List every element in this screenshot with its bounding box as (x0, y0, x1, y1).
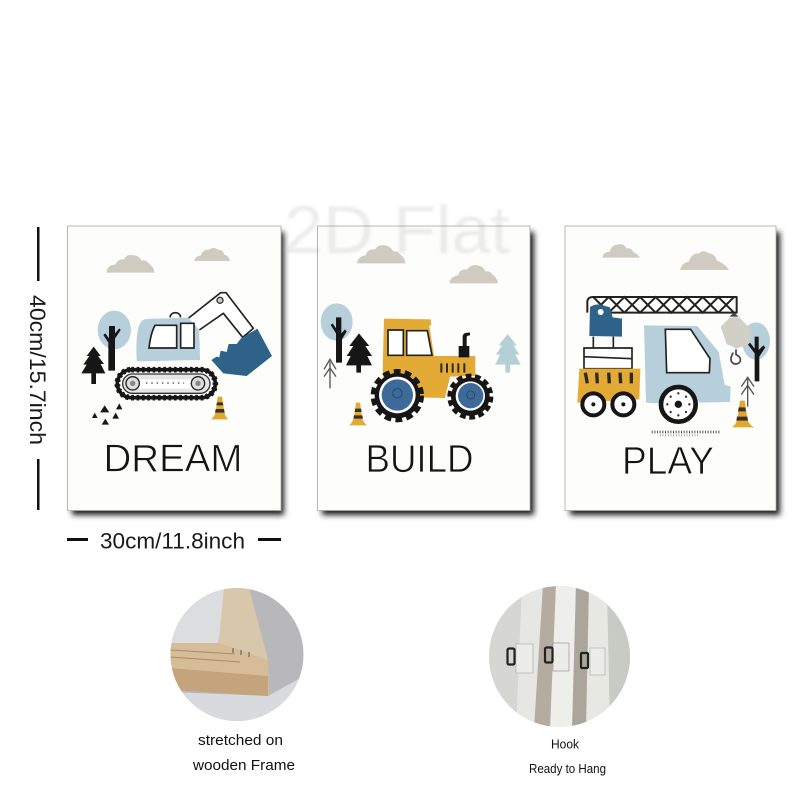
caption: Hook Ready to Hang: Hook (551, 736, 579, 752)
panel: PLAY crane print (565, 226, 780, 515)
caption: Hook Ready to Hang: Ready to Hang (529, 762, 606, 776)
width dimension marker (67, 528, 281, 554)
illustration: excavator scene (81, 248, 272, 425)
caption: Hook Ready to Hang (529, 736, 606, 776)
caption: stretched on wooden Frame: stretched on (198, 732, 283, 749)
word: PLAY: PLAY (622, 440, 714, 483)
word: DREAM: DREAM (104, 438, 242, 480)
illustration: tractor scene (321, 245, 521, 425)
photo: wooden frame corner (170, 588, 304, 722)
caption: stretched on wooden Frame (192, 732, 295, 774)
width label: 30cm/11.8inch (100, 528, 245, 554)
panel: DREAM excavator print (68, 226, 284, 515)
height label: 40cm/15.7inch (25, 295, 50, 445)
illustration: crane truck scene (577, 244, 770, 435)
watermark: 2D Flat: 2D Flat (284, 192, 510, 268)
panel: BUILD tractor print (318, 226, 534, 515)
word: BUILD: BUILD (366, 438, 474, 481)
photo: hanging hooks (488, 585, 632, 729)
caption: stretched on wooden Frame: wooden Frame (192, 757, 295, 774)
